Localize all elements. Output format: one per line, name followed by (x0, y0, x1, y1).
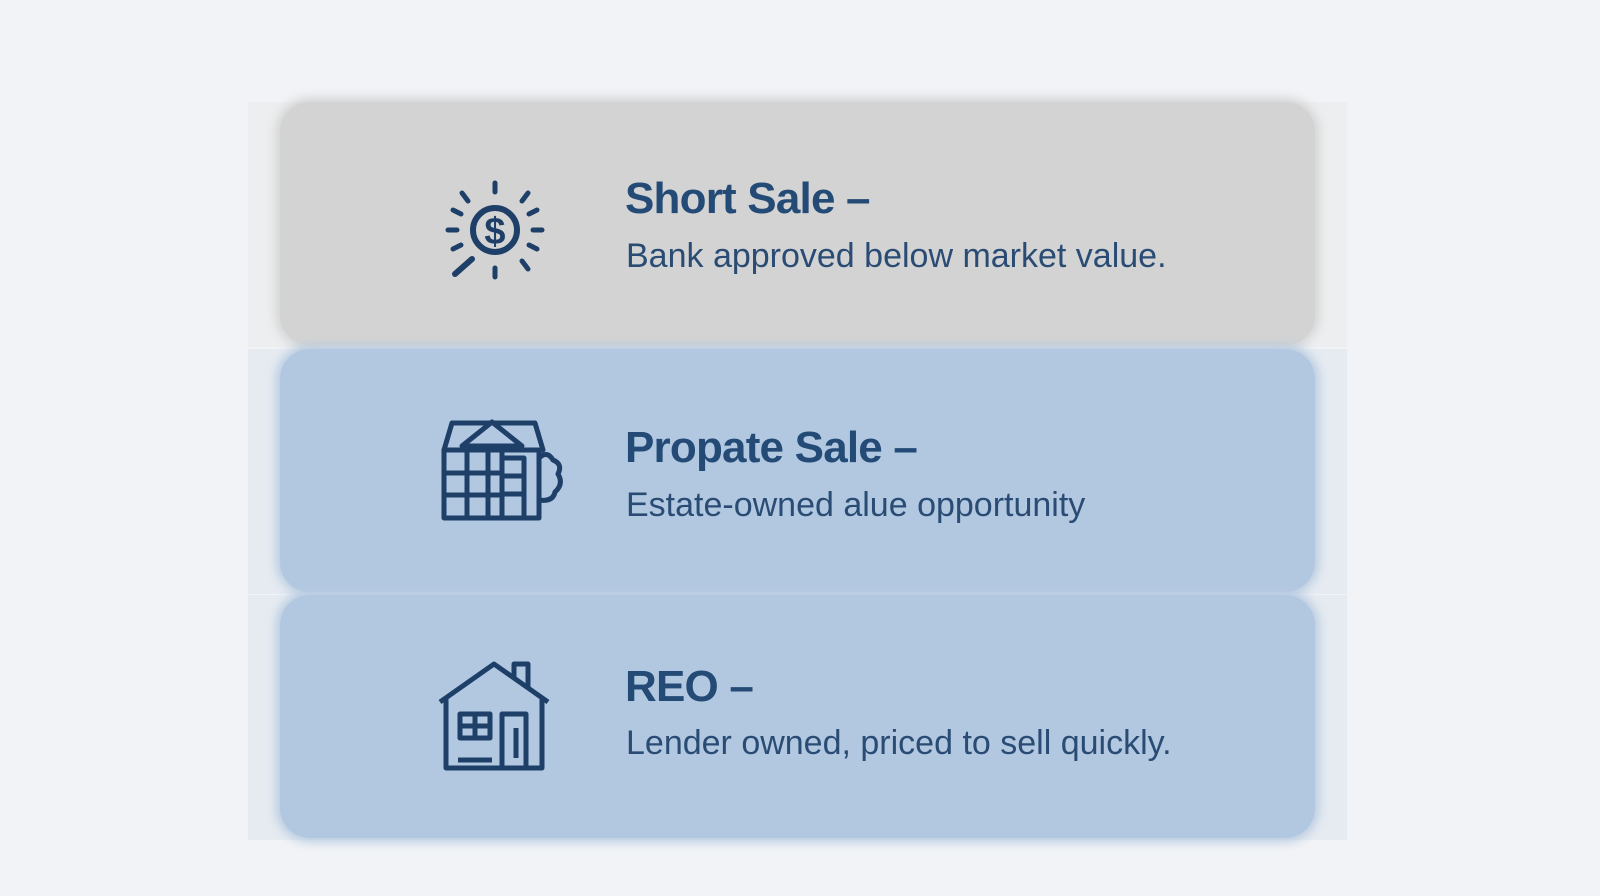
title: probate sale: Propate Sale – (625, 423, 917, 472)
panel: REO (280, 595, 1315, 838)
title: REO: REO – (625, 662, 753, 711)
title: short sale: Short Sale – (625, 174, 870, 223)
panel: probate sale (280, 349, 1315, 592)
icon: REO house (438, 662, 550, 770)
text: REO desc: Lender owned, priced to sell quickly. (626, 724, 1172, 762)
text: short sale desc: Bank approved below market value. (626, 237, 1167, 275)
icon: dollar sun (446, 180, 544, 280)
icon: dollar sun: $ (484, 211, 506, 253)
panel: short sale (280, 102, 1315, 345)
icon: probate house (442, 419, 563, 520)
text: probate desc: Estate-owned alue opportunity (626, 486, 1085, 524)
